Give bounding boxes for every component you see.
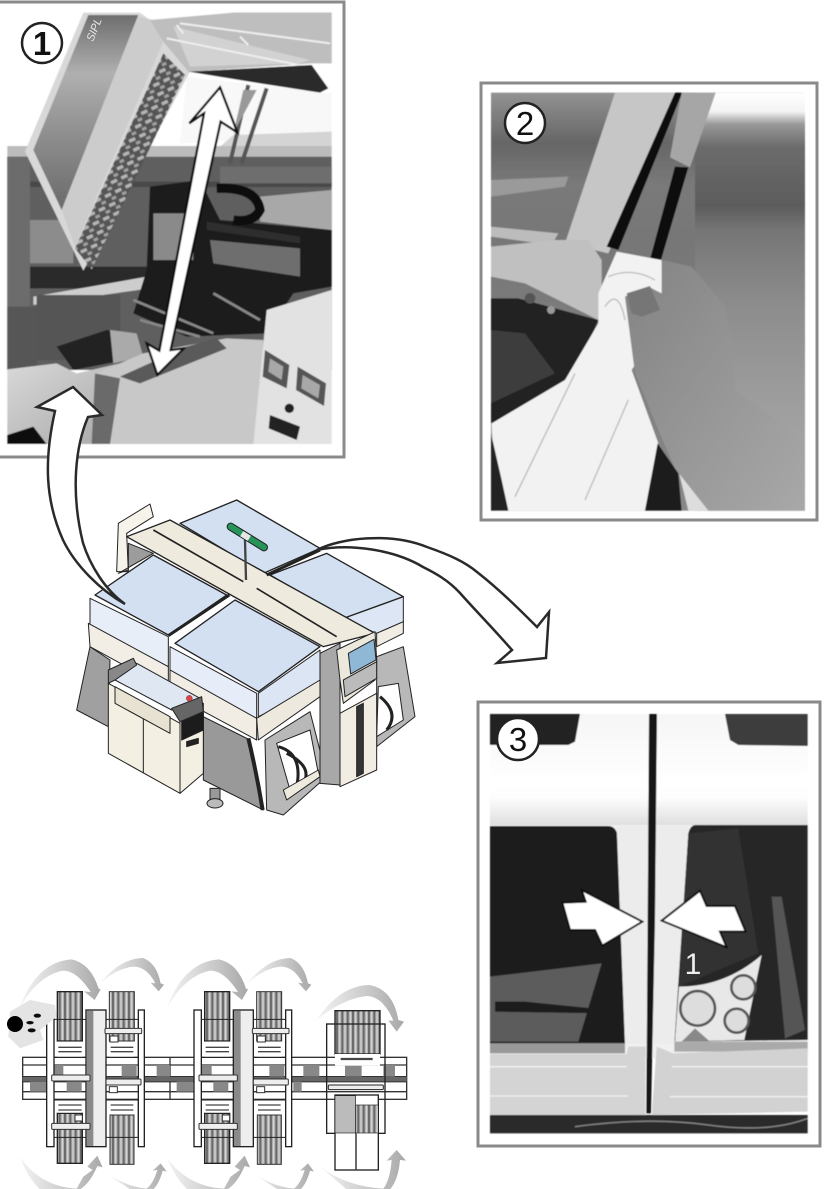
badge 2: 2: [516, 105, 534, 142]
badge 2: [505, 103, 545, 143]
base and side panels: [77, 504, 415, 815]
placement module 1: [47, 992, 144, 1164]
lid logo: SIPL: [85, 17, 105, 43]
curved arrow: from machine up to photo 1: [37, 387, 125, 604]
line schematic: top view of placement line with operator: [7, 958, 407, 1189]
badge 3: 3: [509, 721, 527, 758]
photo 3 content: [490, 714, 808, 1133]
top flow arrows: [19, 958, 404, 1032]
photo panel 1: opened machine hood: [0, 2, 344, 457]
machine isometric illustration: [77, 500, 415, 815]
badge 1: 1: [33, 25, 51, 62]
frame 3: [478, 702, 820, 1146]
photo panel 3: hood gap: [478, 702, 820, 1146]
placement module 2: [194, 992, 292, 1164]
frame 2: [481, 83, 817, 520]
numeral on sticker: 1: [685, 948, 701, 981]
photo panel 2: wiping gas spring: [481, 83, 817, 520]
operator pillar and screen: [337, 632, 377, 787]
frame 1: [0, 2, 344, 457]
placement module 3 with cabinet: [327, 1011, 385, 1170]
signal tower: [231, 527, 264, 580]
bottom flow arrows: [20, 1150, 406, 1189]
front loading cabinet: [108, 658, 223, 808]
photo 1 content: [7, 13, 332, 444]
operator icon: [7, 1000, 57, 1048]
photo 2 content: [491, 93, 805, 511]
badge 1: [22, 23, 62, 63]
roof panels: [95, 500, 403, 692]
conveyor: [23, 1057, 407, 1099]
badge 3: [497, 718, 539, 760]
curved arrow: from machine to photo 3: [317, 538, 549, 663]
